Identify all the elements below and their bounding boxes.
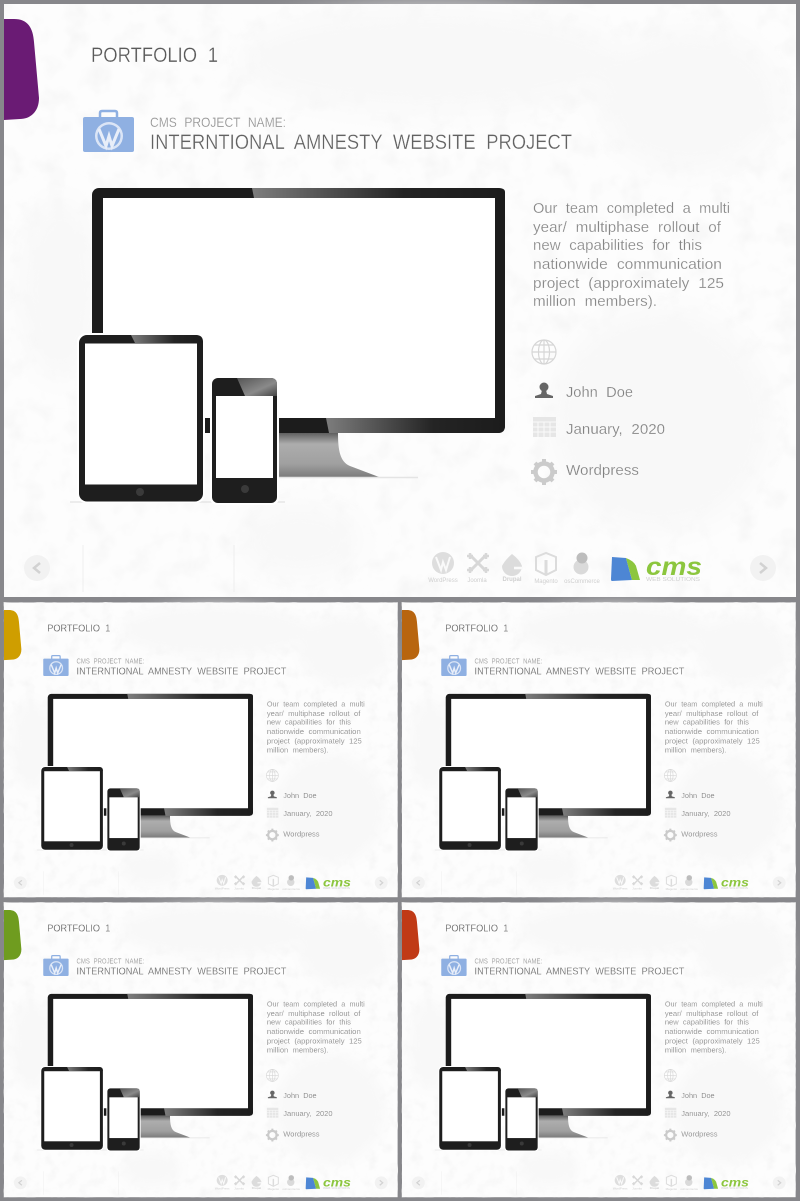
text block: description bbox=[267, 699, 365, 755]
text block: description: new capabilities for this bbox=[267, 718, 351, 727]
label: project name: CMS PROJECT NAME: bbox=[77, 959, 144, 966]
purple corner tab bbox=[4, 19, 39, 120]
device: phone bbox=[210, 376, 279, 505]
text block: description: Our team completed a multi bbox=[665, 699, 763, 708]
text block: description: Our team completed a multi bbox=[267, 999, 365, 1008]
icon: globe bbox=[664, 1069, 676, 1081]
device: tablet bbox=[435, 1066, 542, 1150]
icon: globe bbox=[266, 1069, 278, 1081]
text block: description: project (approximately 125 bbox=[665, 1037, 760, 1046]
text block: description: project (approximately 125 bbox=[665, 737, 760, 746]
icon: person bbox=[535, 382, 553, 398]
device: monitor bbox=[48, 694, 253, 838]
cms logo: WEB SOLUTIONS bbox=[721, 1187, 748, 1190]
panel: gold slide bbox=[4, 602, 398, 897]
navigation arrows bbox=[24, 545, 776, 592]
icon: calendar bbox=[533, 417, 556, 437]
text block: description: nationwide communication bbox=[665, 727, 759, 736]
text block: description: nationwide communication bbox=[533, 256, 722, 273]
icon: gear bbox=[266, 829, 279, 842]
text block: description bbox=[665, 699, 763, 755]
platform logo labels: Joomla bbox=[632, 1187, 642, 1191]
platform logo labels: osCommerce bbox=[282, 1187, 300, 1191]
author name: John Doe bbox=[681, 1091, 715, 1100]
date: January, 2020 bbox=[681, 1109, 731, 1118]
text block: description bbox=[665, 999, 763, 1055]
device: tablet bbox=[37, 1066, 144, 1150]
icon: calendar bbox=[665, 808, 676, 818]
platform: Wordpress bbox=[681, 1130, 718, 1139]
panel: green slide bbox=[4, 902, 398, 1197]
platform logo labels: Joomla bbox=[632, 887, 642, 891]
platform logo labels: Magento bbox=[534, 579, 558, 585]
slide background bbox=[4, 902, 398, 1197]
slide background bbox=[402, 602, 796, 897]
platform logo labels: Drupal bbox=[502, 577, 522, 583]
text block: description: million members). bbox=[267, 746, 329, 755]
icon: calendar bbox=[267, 1108, 278, 1118]
platform: Wordpress bbox=[283, 830, 320, 839]
icon: gear bbox=[664, 829, 677, 842]
text block: description: year/ multiphase rollout of bbox=[267, 709, 361, 718]
text block: description: year/ multiphase rollout of bbox=[665, 709, 759, 718]
text block: description: nationwide communication bbox=[267, 727, 361, 736]
text block: description bbox=[533, 200, 730, 310]
cms logo: WEB SOLUTIONS bbox=[721, 887, 748, 890]
text block: description: million members). bbox=[665, 1046, 727, 1055]
platform logo labels bbox=[428, 577, 600, 585]
platform logos bbox=[217, 1175, 294, 1187]
text block: description: project (approximately 125 bbox=[533, 275, 724, 292]
navigation arrows bbox=[412, 1171, 786, 1195]
red corner tab bbox=[402, 910, 419, 960]
date: January, 2020 bbox=[283, 809, 333, 818]
text block: description: new capabilities for this bbox=[267, 1018, 351, 1027]
platform logos bbox=[432, 552, 588, 576]
icon: calendar bbox=[267, 808, 278, 818]
title: project: INTERNTIONAL AMNESTY WEBSITE PROJECT bbox=[475, 667, 685, 678]
text block: description bbox=[267, 999, 365, 1055]
platform logo labels: Magento bbox=[268, 887, 279, 891]
text block: description: nationwide communication bbox=[267, 1027, 361, 1036]
cms logo bbox=[704, 875, 749, 890]
author name: John Doe bbox=[566, 384, 633, 401]
platform: Wordpress bbox=[566, 462, 639, 479]
slide background bbox=[4, 4, 796, 597]
navigation arrows bbox=[14, 871, 388, 895]
platform logo labels: Joomla bbox=[234, 887, 244, 891]
text block: description: nationwide communication bbox=[665, 1027, 759, 1036]
heading: portfolio: PORTFOLIO 1 bbox=[47, 923, 111, 934]
platform logo labels: Drupal bbox=[650, 1186, 659, 1190]
device: phone bbox=[106, 787, 141, 851]
icon: briefcase bbox=[43, 956, 69, 976]
text block: description: new capabilities for this bbox=[665, 1018, 749, 1027]
icon: person bbox=[666, 791, 675, 798]
icon: briefcase bbox=[441, 656, 467, 676]
platform logo labels: WordPress bbox=[215, 1187, 230, 1191]
panel: red slide bbox=[402, 902, 796, 1197]
cms logo: cms bbox=[721, 1175, 749, 1189]
cms logo: cms bbox=[721, 875, 749, 889]
platform logo labels bbox=[215, 886, 300, 891]
navigation arrows bbox=[412, 871, 786, 895]
platform logo labels: Magento bbox=[666, 887, 677, 891]
gold corner tab bbox=[4, 610, 21, 660]
cms logo: WEB SOLUTIONS bbox=[323, 1187, 350, 1190]
icon: person bbox=[666, 1091, 675, 1098]
heading: portfolio: PORTFOLIO 1 bbox=[445, 623, 509, 634]
platform logo labels: osCommerce bbox=[680, 1187, 698, 1191]
icon: globe bbox=[664, 769, 676, 781]
platform logo labels: Magento bbox=[666, 1187, 677, 1191]
text block: description: year/ multiphase rollout of bbox=[533, 219, 722, 236]
date: January, 2020 bbox=[681, 809, 731, 818]
author name: John Doe bbox=[283, 791, 317, 800]
cms logo bbox=[611, 553, 702, 583]
cms logo: cms bbox=[323, 875, 351, 889]
device: phone bbox=[504, 787, 539, 851]
slide background bbox=[402, 902, 796, 1197]
cms logo: WEB SOLUTIONS bbox=[323, 887, 350, 890]
device: monitor bbox=[48, 994, 253, 1138]
text block: description: year/ multiphase rollout of bbox=[267, 1009, 361, 1018]
icon: globe bbox=[532, 340, 556, 364]
cms logo bbox=[704, 1175, 749, 1190]
cms logo: cms bbox=[646, 553, 702, 581]
text block: description: Our team completed a multi bbox=[665, 999, 763, 1008]
platform logo labels: Drupal bbox=[252, 886, 261, 890]
platform logo labels bbox=[613, 886, 698, 891]
text block: description: Our team completed a multi bbox=[267, 699, 365, 708]
text block: description: new capabilities for this bbox=[533, 237, 702, 254]
label: project name: CMS PROJECT NAME: bbox=[150, 114, 286, 130]
text block: description: year/ multiphase rollout of bbox=[665, 1009, 759, 1018]
cms logo: WEB SOLUTIONS bbox=[646, 577, 701, 583]
title: project: INTERNTIONAL AMNESTY WEBSITE PROJECT bbox=[77, 667, 287, 678]
panel: orange slide bbox=[402, 602, 796, 897]
device: monitor bbox=[446, 994, 651, 1138]
platform logos bbox=[615, 875, 692, 887]
device: phone bbox=[504, 1087, 539, 1151]
platform logo labels: Joomla bbox=[234, 1187, 244, 1191]
heading: portfolio: PORTFOLIO 1 bbox=[91, 44, 218, 67]
label: project name: CMS PROJECT NAME: bbox=[475, 959, 542, 966]
device: monitor bbox=[92, 188, 505, 478]
author name: John Doe bbox=[283, 1091, 317, 1100]
orange corner tab bbox=[402, 610, 419, 660]
platform logo labels: WordPress bbox=[613, 887, 628, 891]
text block: description: million members). bbox=[267, 1046, 329, 1055]
date: January, 2020 bbox=[566, 421, 665, 438]
cms logo bbox=[306, 875, 351, 890]
icon: briefcase bbox=[441, 956, 467, 976]
device: monitor bbox=[446, 694, 651, 838]
platform logo labels bbox=[613, 1186, 698, 1191]
icon: person bbox=[268, 1091, 277, 1098]
cms logo bbox=[306, 1175, 351, 1190]
platform logo labels: WordPress bbox=[613, 1187, 628, 1191]
text block: description: new capabilities for this bbox=[665, 718, 749, 727]
icon: person bbox=[268, 791, 277, 798]
heading: portfolio: PORTFOLIO 1 bbox=[445, 923, 509, 934]
icon: briefcase bbox=[83, 111, 134, 152]
icon: calendar bbox=[665, 1108, 676, 1118]
label: project name: CMS PROJECT NAME: bbox=[77, 659, 144, 666]
platform logo labels: Drupal bbox=[650, 886, 659, 890]
device: tablet bbox=[70, 333, 285, 503]
icon: globe bbox=[266, 769, 278, 781]
device: tablet bbox=[435, 766, 542, 850]
platform logo labels: Drupal bbox=[252, 1186, 261, 1190]
icon: briefcase bbox=[43, 656, 69, 676]
platform logo labels: WordPress bbox=[215, 887, 230, 891]
author name: John Doe bbox=[681, 791, 715, 800]
platform logo labels: osCommerce bbox=[680, 887, 698, 891]
icon: gear bbox=[664, 1129, 677, 1142]
platform logos bbox=[217, 875, 294, 887]
text block: description: million members). bbox=[665, 746, 727, 755]
slide background bbox=[4, 602, 398, 897]
platform: Wordpress bbox=[681, 830, 718, 839]
text block: description: project (approximately 125 bbox=[267, 1037, 362, 1046]
cms logo: cms bbox=[323, 1175, 351, 1189]
label: project name: CMS PROJECT NAME: bbox=[475, 659, 542, 666]
text block: description: Our team completed a multi bbox=[533, 200, 730, 217]
platform: Wordpress bbox=[283, 1130, 320, 1139]
navigation arrows bbox=[14, 1171, 388, 1195]
date: January, 2020 bbox=[283, 1109, 333, 1118]
platform logo labels: Magento bbox=[268, 1187, 279, 1191]
green corner tab bbox=[4, 910, 21, 960]
heading: portfolio: PORTFOLIO 1 bbox=[47, 623, 111, 634]
text block: description: project (approximately 125 bbox=[267, 737, 362, 746]
device: phone bbox=[106, 1087, 141, 1151]
device: tablet bbox=[37, 766, 144, 850]
platform logo labels: osCommerce bbox=[282, 887, 300, 891]
platform logo labels bbox=[215, 1186, 300, 1191]
icon: gear bbox=[266, 1129, 279, 1142]
panel: main slide bbox=[4, 4, 796, 597]
title: project: INTERNTIONAL AMNESTY WEBSITE PROJECT bbox=[475, 967, 685, 978]
text block: description: million members). bbox=[533, 293, 657, 310]
platform logo labels: osCommerce bbox=[564, 579, 600, 585]
platform logo labels: Joomla bbox=[467, 578, 487, 584]
platform logos bbox=[615, 1175, 692, 1187]
title: project: INTERNTIONAL AMNESTY WEBSITE PROJECT bbox=[77, 967, 287, 978]
icon: gear bbox=[531, 459, 557, 485]
platform logo labels: WordPress bbox=[428, 578, 458, 584]
title: project: INTERNTIONAL AMNESTY WEBSITE PROJECT bbox=[150, 131, 572, 154]
